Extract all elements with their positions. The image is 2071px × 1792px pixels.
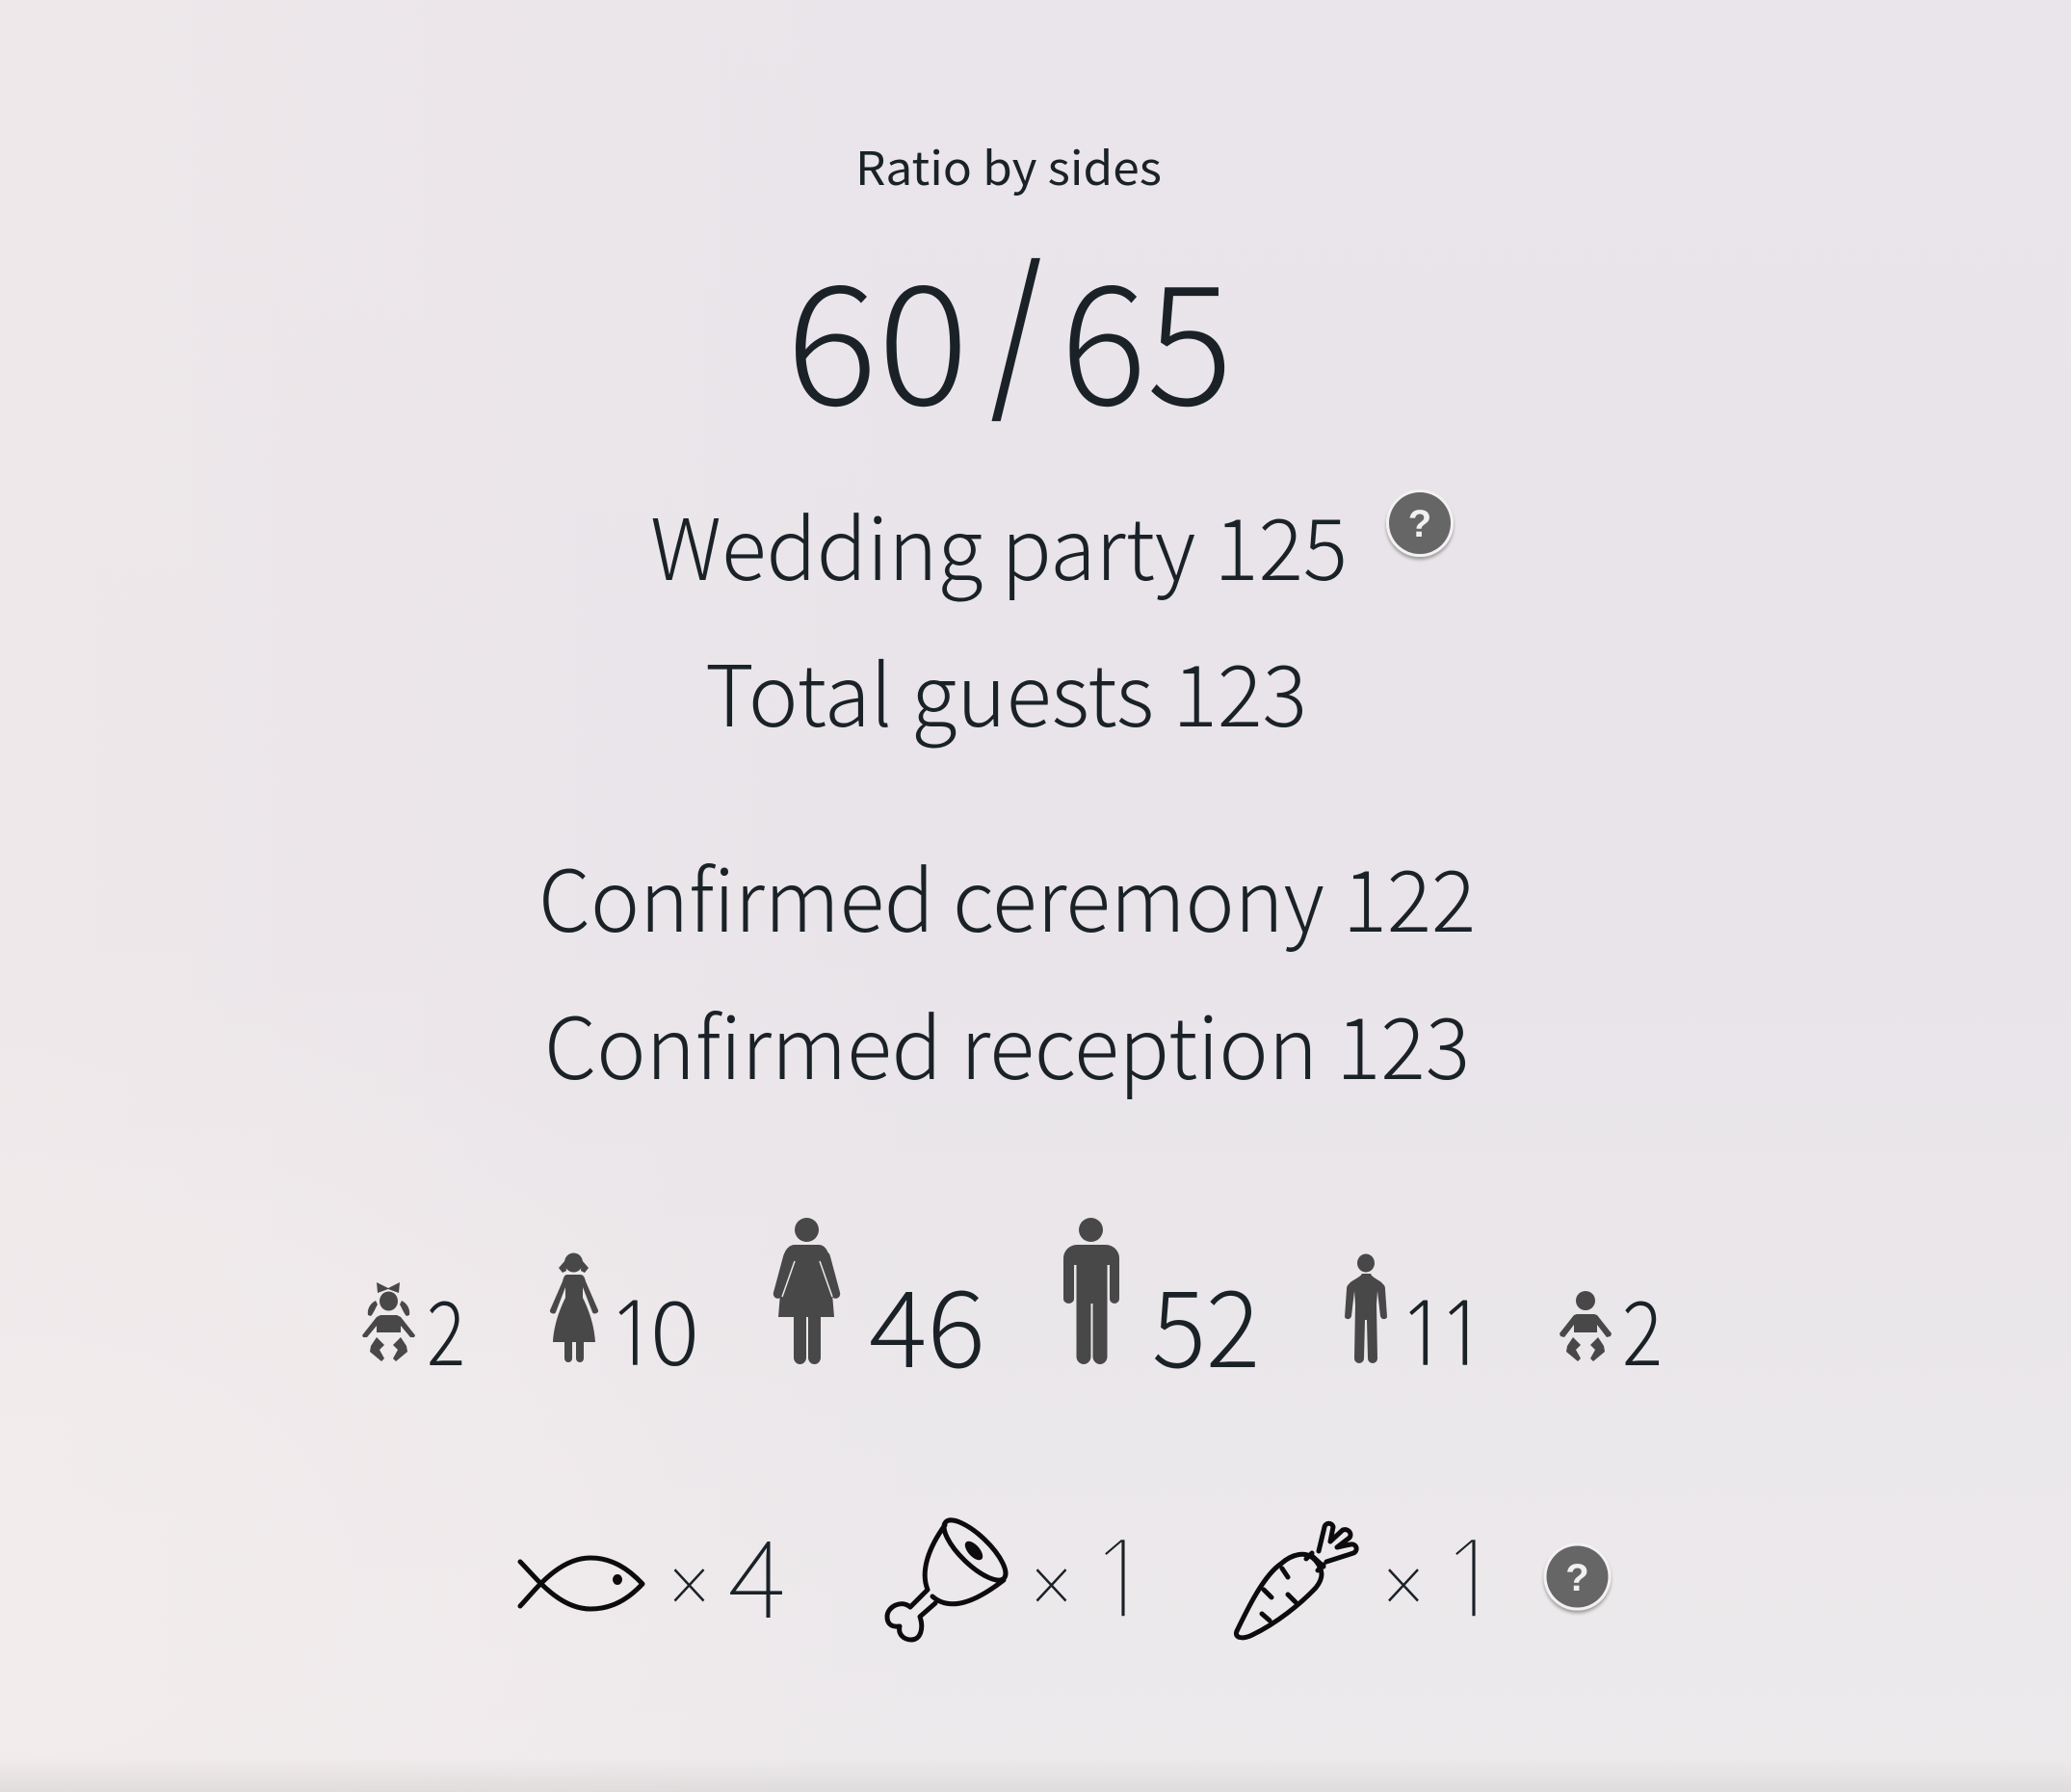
count: women: 46 <box>869 1244 985 1398</box>
big number: 60/65 ratio: / <box>990 198 1042 440</box>
icon: meat <box>887 1512 1014 1640</box>
count: baby boys: 2 <box>1622 1263 1663 1391</box>
icon: woman <box>778 1218 836 1364</box>
help button: meals <box>1543 1543 1611 1611</box>
multiplier: fish: × <box>665 1543 713 1621</box>
count: baby girls: 2 <box>427 1263 465 1391</box>
icon: carrot <box>1236 1523 1356 1638</box>
meal choices row <box>520 1493 1611 1649</box>
count: men: 52 <box>1152 1244 1260 1398</box>
count: girls: 0 <box>650 1263 699 1391</box>
big number: 60/65 ratio <box>786 198 1233 453</box>
icon: baby girl <box>362 1282 415 1361</box>
stat: confirmed ceremony: Confirmed ceremony 122 <box>538 834 1476 957</box>
icon: boy <box>1345 1254 1387 1363</box>
help button: wedding party: ? <box>1408 503 1431 545</box>
big number: 60/65 ratio: 60 <box>786 212 969 453</box>
icon: man <box>1063 1218 1119 1364</box>
count: fish: 4 <box>728 1493 786 1649</box>
guest demographics row <box>362 1218 1663 1398</box>
icon: fish <box>520 1558 642 1609</box>
count: girls: 1 <box>606 1290 659 1379</box>
help button: wedding party <box>1386 489 1454 557</box>
count: girls <box>606 1263 699 1391</box>
stat: confirmed reception: Confirmed reception 123 <box>544 982 1470 1104</box>
count: boys: 1 <box>1436 1290 1488 1379</box>
big number: 60/65 ratio: 65 <box>1061 212 1233 453</box>
multiplier: carrot: × <box>1379 1543 1428 1621</box>
help button: meals: ? <box>1565 1557 1589 1599</box>
count: boys: 1 <box>1397 1290 1449 1379</box>
icon: baby boy <box>1560 1291 1612 1361</box>
heading: ratio by sides: Ratio by sides <box>855 131 1162 198</box>
count: carrot: 1 <box>1438 1526 1503 1634</box>
stat: total guests: Total guests 123 <box>705 629 1307 751</box>
count: boys <box>1397 1290 1488 1379</box>
stat: wedding party: Wedding party 125 <box>650 483 1348 605</box>
count: meat: 1 <box>1088 1526 1152 1634</box>
multiplier: meat: × <box>1027 1543 1075 1621</box>
icon: girl <box>550 1252 598 1362</box>
